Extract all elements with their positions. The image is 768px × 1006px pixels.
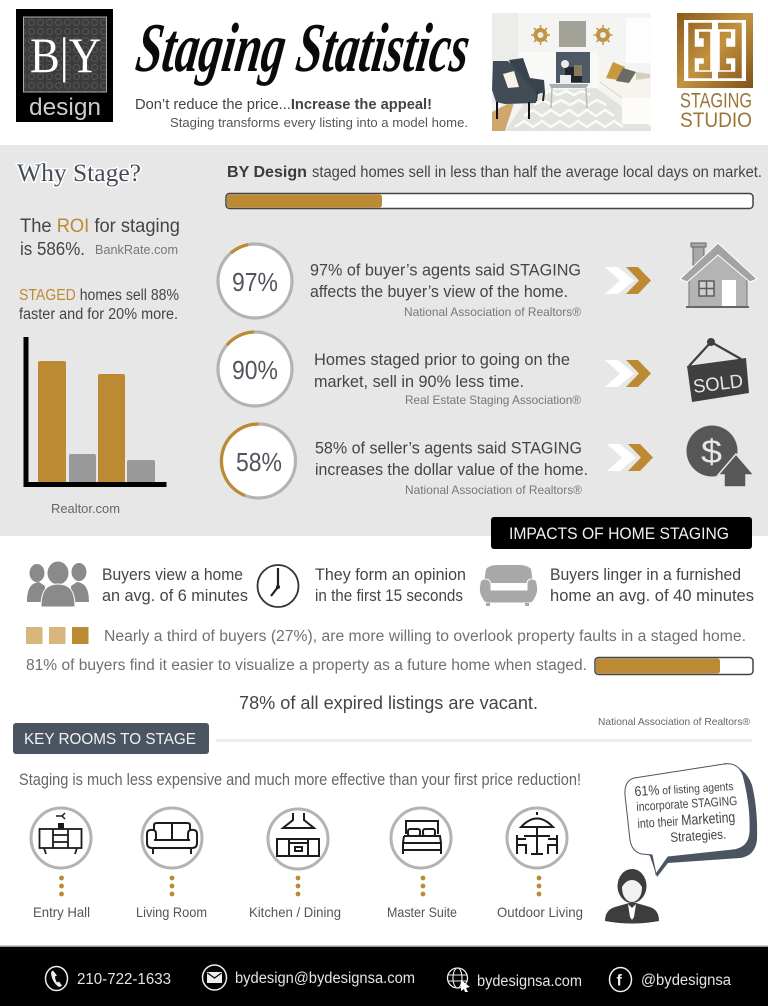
room: entry hall: Entry Hall <box>33 904 90 920</box>
logo: staging studio <box>680 16 752 132</box>
text: ROI: The ROI for staging <box>20 215 180 237</box>
stat row text: buyer's agents: 97% of buyer’s agents said STAGING <box>310 260 581 280</box>
callout: speech bubble: Strategies. <box>670 827 727 845</box>
heading: impacts of home staging <box>491 517 752 549</box>
headline: days on market: BY Design <box>227 164 307 181</box>
icon: dollar with arrow <box>686 426 754 487</box>
callout: speech bubble <box>625 763 757 877</box>
text: buyers linger <box>550 566 754 605</box>
stat row text: staged prior: market, sell in 90% less time. <box>314 372 524 391</box>
subtitle: Don’t reduce the price...Increase the appeal! <box>135 97 432 113</box>
text: 81 percent: 81% of buyers find it easier to visualize a property as a future home when staged. <box>26 657 587 674</box>
text: less expensive: Staging is much less expensive and much more effective than your first price reduction! <box>19 771 581 789</box>
text: ROI: is 586%. <box>20 238 85 259</box>
heading: impacts of home staging: IMPACTS OF HOME STAGING <box>509 525 729 543</box>
stat row text: buyer's agents: National Association of Realtors® <box>404 305 581 319</box>
stat row text: seller's agents: National Association of Realtors® <box>405 483 582 497</box>
stat ring: 58%: 58% <box>236 447 282 477</box>
text: form an opinion <box>315 566 466 605</box>
callout: speech bubble: into their Marketing <box>637 809 736 832</box>
text: buyers view a home: Buyers view a home <box>102 566 243 584</box>
stat row text: staged prior: Homes staged prior to going on the <box>314 350 570 369</box>
stat ring: 90% <box>218 332 292 406</box>
text: staged homes sell faster: STAGED homes sell 88% <box>19 287 179 304</box>
room: outdoor living <box>497 808 583 920</box>
footer: phone: 210-722-1633 <box>77 971 171 988</box>
stat row text: staged prior <box>314 350 581 407</box>
footer: website <box>448 968 582 992</box>
stat row text: buyer's agents <box>310 260 581 319</box>
icon: clock <box>258 565 298 607</box>
stat row text: seller's agents: 58% of seller’s agents said STAGING <box>315 438 582 458</box>
photo: staged living room <box>492 13 651 131</box>
icon: sold sign: SOLD <box>692 371 744 398</box>
icon: person <box>605 869 659 924</box>
text: nearly a third: Nearly a third of buyers (27%), are more willing to overlook property faults in a staged home. <box>104 628 746 645</box>
footer: facebook <box>610 968 731 992</box>
text: expired listings: 78% of all expired listings are vacant. <box>239 693 538 713</box>
room: outdoor living: Outdoor Living <box>497 904 583 920</box>
room: kitchen dining: Kitchen / Dining <box>249 904 341 920</box>
icon: armchair <box>479 565 538 606</box>
footer: website: bydesignsa.com <box>477 973 582 990</box>
logo: BY design <box>16 9 113 122</box>
footer: facebook: f <box>616 972 622 990</box>
progress bar: 81 percent <box>595 658 753 674</box>
text: staged homes sell faster: faster and for 20% more. <box>19 306 178 323</box>
stat row text: staged prior: Real Estate Staging Association® <box>405 393 581 407</box>
room: kitchen dining <box>249 809 341 920</box>
text: ROI: BankRate.com <box>95 242 178 257</box>
panel: why stage background <box>0 145 768 536</box>
subtitle <box>135 97 468 130</box>
title: Staging Statistics <box>132 9 475 87</box>
text: buyers linger: Buyers linger in a furnished <box>550 566 741 584</box>
source: realtor.com: Realtor.com <box>51 501 120 516</box>
text: staged homes sell faster <box>19 287 179 323</box>
icon: sold sign <box>687 338 749 402</box>
stat ring: 97%: 97% <box>232 267 278 297</box>
arrows: row 2 <box>605 360 651 387</box>
room: master suite: Master Suite <box>387 904 457 920</box>
text: form an opinion: in the first 15 seconds <box>315 587 463 605</box>
logo: BY design: B|Y <box>30 27 101 83</box>
icon: people <box>27 561 89 607</box>
footer: facebook: @bydesignsa <box>641 972 731 989</box>
arrows: row 3 <box>607 444 653 471</box>
logo: BY design: design <box>29 94 101 121</box>
icon: third squares <box>26 627 88 644</box>
icon: house <box>680 243 757 308</box>
icon: dollar with arrow: $ <box>701 433 722 470</box>
stat row text: seller's agents <box>315 438 588 497</box>
source: national association: National Association of Realtors® <box>598 716 750 728</box>
room: living room: Living Room <box>136 904 207 920</box>
text: buyers view a home <box>102 566 248 605</box>
stat ring: 90%: 90% <box>232 355 278 385</box>
room: master suite <box>387 808 457 920</box>
callout: speech bubble: incorporate STAGING <box>636 794 738 814</box>
footer: email: bydesign@bydesignsa.com <box>235 970 415 987</box>
progress bar: days on market <box>226 194 753 208</box>
callout: speech bubble: 61% of listing agents <box>634 777 734 799</box>
stat ring: 58% <box>221 424 296 498</box>
heading: why stage: Why Stage? <box>17 160 141 187</box>
stat row text: seller's agents: increases the dollar value of the home. <box>315 460 588 479</box>
logo: staging studio: STUDIO <box>680 109 752 132</box>
stat ring: 97% <box>218 244 292 318</box>
text: ROI <box>20 215 180 259</box>
footer: phone <box>46 966 171 990</box>
room: living room <box>136 808 207 920</box>
heading: key rooms to stage: KEY ROOMS TO STAGE <box>24 731 196 748</box>
footer: email <box>202 965 415 990</box>
text: form an opinion: They form an opinion <box>315 566 466 584</box>
footer <box>0 946 768 1006</box>
stat row text: buyer's agents: affects the buyer’s view of the home. <box>310 282 568 301</box>
text: buyers view a home: an avg. of 6 minutes <box>102 587 248 605</box>
room: entry hall <box>31 808 91 920</box>
arrows: row 1 <box>605 267 651 294</box>
subtitle: Staging transforms every listing into a model home. <box>170 115 468 130</box>
text: buyers linger: home an avg. of 40 minutes <box>550 587 754 605</box>
heading: key rooms to stage <box>13 723 209 754</box>
bar chart <box>24 337 166 487</box>
